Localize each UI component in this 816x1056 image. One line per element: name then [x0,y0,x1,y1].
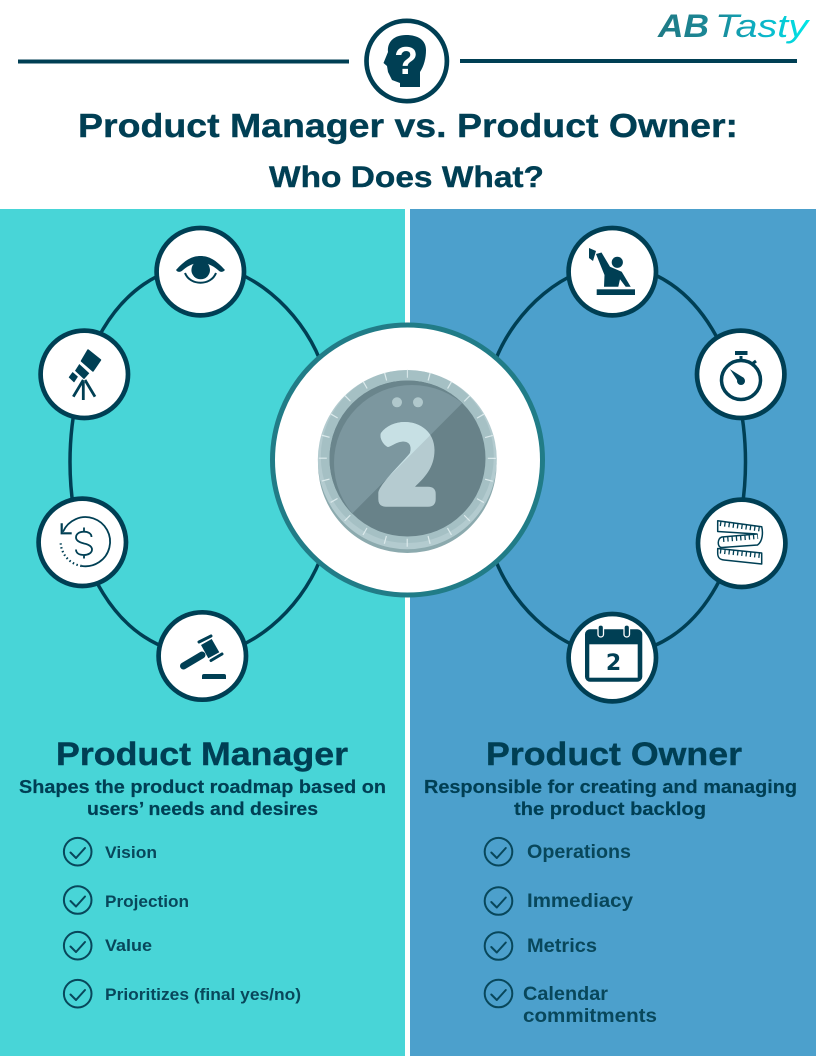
header rule: right [460,59,797,63]
logo: AB Tasty [657,8,810,44]
item: Operations: Operations [527,842,631,863]
item: Projection [64,886,189,914]
heading: Product Manager: Product Manager [56,736,348,772]
description: Product Manager [19,776,386,819]
item: Prioritizes [64,980,301,1008]
item: Vision [64,838,157,866]
icon: hammering person [569,228,656,315]
icon: stopwatch [697,331,784,418]
description: Product Manager: Shapes the product roadmap based on [19,776,386,797]
item: Immediacy: Immediacy [527,891,633,912]
title [78,108,738,194]
item: Immediacy [485,887,633,915]
checklist: Product Manager [64,838,301,1008]
header rule: left [18,60,349,64]
title: Who Does What? [269,161,544,194]
panel: Product Manager [0,209,405,1056]
central badge: number 2 coin [272,325,542,595]
icon: calendar [569,614,656,701]
icon: telescope [41,331,128,418]
item: Calendar commitments: Calendar [523,984,609,1005]
description: Product Manager: users’ needs and desires [87,798,318,819]
item: Operations [485,838,631,866]
icon: eye [157,228,244,315]
icon: gavel [159,612,246,700]
item: Vision: Vision [105,843,157,862]
icon: calendar: 2 [606,651,621,676]
oval connector: left [70,265,320,655]
oval connector: right [496,265,746,655]
item: Calendar commitments [485,980,657,1027]
logo: AB Tasty: Tasty [715,8,810,44]
item: Projection: Projection [105,892,189,911]
item: Metrics [485,932,597,960]
item: Prioritizes: Prioritizes (final yes/no) [105,985,301,1004]
icon: measuring tape [698,500,785,587]
checklist: Product Owner [485,838,657,1027]
logo: AB Tasty: AB [657,8,709,44]
item: Value: Value [105,936,152,955]
title: Product Manager vs. Product Owner: [78,108,738,145]
panel background: teal [0,209,405,1056]
icon: head with question mark: ? [394,40,418,83]
icon: dollar with return arrow [39,499,126,586]
item: Value [64,932,152,960]
description: Product Owner: the product backlog [514,798,706,819]
item: Metrics: Metrics [527,936,597,957]
icon: head with question mark [366,21,447,101]
item: Calendar commitments: commitments [523,1006,657,1027]
description: Product Owner: Responsible for creating and managing [424,776,797,797]
panel background: blue [410,209,816,1056]
description: Product Owner [424,776,797,819]
heading: Product Owner: Product Owner [486,736,742,772]
panel: Product Owner [410,209,816,1056]
